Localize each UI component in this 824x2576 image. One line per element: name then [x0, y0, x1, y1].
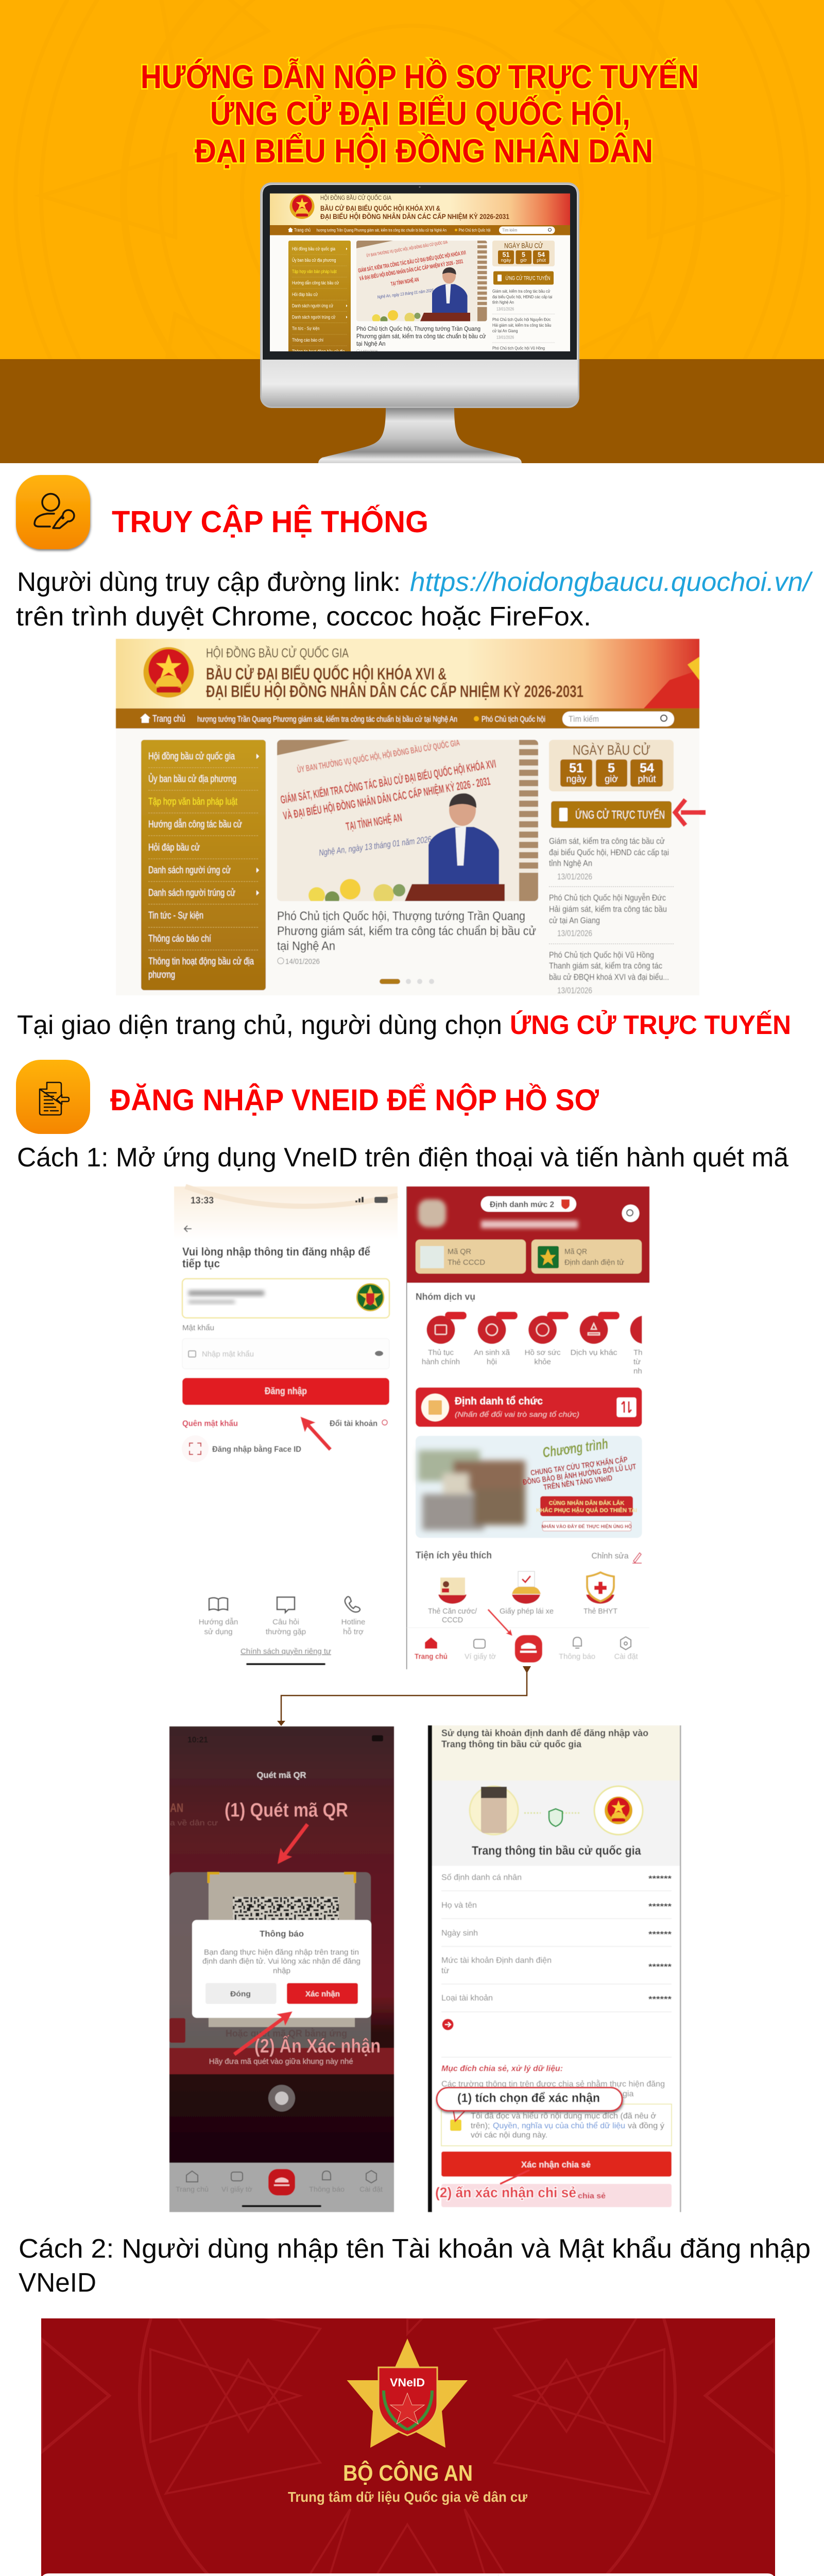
website screenshot inside monitor: 13/01/2026 [496, 335, 514, 340]
title: ĐẠI BIỂU HỘI ĐỒNG NHÂN DÂN [195, 132, 653, 170]
phone 4: share confirmation: chia sẻ [578, 2192, 606, 2200]
countdown card: 51 [569, 761, 583, 775]
news caption [277, 909, 536, 984]
phone 1: login screen: Chính sách quyền riêng tư [241, 1647, 331, 1656]
website screenshot inside monitor: Hội đồng bầu cử quốc gia [292, 246, 336, 252]
website screenshot inside monitor: ỨNG CỬ TRỰC TUYẾN [506, 275, 551, 281]
phone 1: login screen: 13:33 [191, 1195, 214, 1206]
news photo: Nghệ An, ngày 13 tháng 01 năm 2026 [318, 834, 432, 858]
phone 4: share confirmation: ****** [648, 1962, 672, 1972]
website screenshot inside monitor: Tin tức - Sự kiện [292, 326, 319, 332]
red header with star logo: Trung tâm dữ liệu Quốc gia về dân cư [288, 2489, 528, 2505]
title: HƯỚNG DẪN NỘP HỒ SƠ TRỰC TUYẾN [141, 58, 699, 95]
modal: thong bao: Thông báo [260, 1929, 304, 1939]
website screenshot inside monitor: Trang chủ [294, 228, 311, 233]
phone 4: share confirmation: trên); [471, 2122, 490, 2130]
annotation: share confirm: (2) ấn xác nhận chi sẻ [435, 2184, 576, 2200]
website screenshot inside monitor: VÀ ĐẠI BIỂU HỘI ĐỒNG NHÂN DÂN CÁC CẤP NHIỆM KỲ 2026 - 2031 [359, 258, 464, 282]
phone 1: login screen: Quên mật khẩu [182, 1419, 238, 1428]
phone 2: vneid home [406, 1187, 658, 1669]
modal: thong bao: Xác nhận [305, 1990, 340, 1998]
promo banner: ĐỒNG BÀO BỊ ẢNH HƯỞNG BỞI LŨ LỤT [522, 1462, 637, 1487]
website screenshot inside monitor: 54 [538, 251, 545, 259]
website screenshot inside monitor: ỦY BAN THƯỜNG VỤ QUỐC HỘI, HỘI ĐỒNG BẦU CỬ QUỐC GIA [366, 239, 448, 258]
phone 4: share confirmation: Các trường thông tin trên được chia sẻ nhằm thực hiện đăng [441, 2079, 665, 2089]
side menu: Ủy ban bầu cử địa phương [148, 773, 236, 785]
phone 1: login screen: Đổi tài khoản [330, 1419, 377, 1428]
phone 4: share confirmation: Mục đích chia sẻ, xử lý dữ liệu: [441, 2064, 563, 2073]
news photo: GIÁM SÁT, KIỂM TRA CÔNG TÁC BẦU CỬ ĐẠI BIỂU QUỐC HỘI KHÓA XVI [279, 757, 497, 806]
side menu: Hội đồng bầu cử quốc gia [148, 751, 235, 762]
text block: select online candidacy [17, 1010, 791, 1040]
website screenshot inside monitor: Giám sát, kiểm tra công tác bầu cử [492, 289, 551, 294]
website screenshot inside monitor: Nghệ An, ngày 13 tháng 01 năm 2026 [377, 287, 434, 299]
website screenshot inside monitor: GIÁM SÁT, KIỂM TRA CÔNG TÁC BẦU CỬ ĐẠI BIỂU QUỐC HỘI KHÓA XVI [357, 249, 467, 274]
website screenshot: ĐẠI BIỂU HỘI ĐỒNG NHÂN DÂN CÁC CẤP NHIỆM KỲ 2026-2031 [206, 682, 583, 701]
phone 2: vneid home: Định danh mức 2 [490, 1200, 554, 1209]
phone 3: qr scan: Trang chủ [176, 2185, 209, 2193]
text block: link instructions: trên trình duyệt Chrome, coccoc hoặc FireFox. [16, 602, 591, 632]
phone 2: vneid home: Thẻ BHYT [583, 1607, 617, 1616]
website screenshot inside monitor [270, 194, 570, 366]
countdown card: 54 [640, 761, 654, 775]
text block: select online candidacy: Tại giao diện trang chủ, người dùng chọn [17, 1010, 502, 1040]
service icons: từ cơ [633, 1358, 652, 1366]
bottom nav: Cài đặt [614, 1652, 638, 1661]
service icons: Hồ sơ sức [525, 1348, 561, 1357]
phone 2: vneid home: Nhóm dịch vụ [416, 1292, 475, 1302]
news photo [277, 737, 538, 906]
news list: cử tại An Giang [549, 916, 600, 925]
website screenshot inside monitor: Phó Chủ tịch Quốc hội [458, 228, 491, 233]
phone 3: qr scan: Hoặc quét mã QR bằng ứng [226, 2028, 347, 2039]
phone 1: login screen: thường gặp [266, 1628, 306, 1636]
annotation: scan qr [225, 1800, 348, 1860]
phone 2: vneid home: (Nhấn để đổi vai trò sang tổ chức) [455, 1410, 579, 1418]
website screenshot inside monitor: Hải giám sát, kiểm tra công tác bầu [492, 323, 552, 328]
button: ung cu truc tuyen: ỨNG CỬ TRỰC TUYẾN [575, 808, 665, 821]
website screenshot inside monitor: Tìm kiếm [502, 228, 517, 233]
phone 2: vneid home: Giấy phép lái xe [500, 1607, 554, 1616]
icon: face to emblem [470, 1786, 643, 1835]
bottom nav [415, 1635, 638, 1663]
promo banner: CHUNG TAY CỨU TRỢ KHẨN CẤP [530, 1455, 628, 1478]
phone 4: share confirmation: Ngày sinh [441, 1929, 478, 1938]
news list: bầu cử ĐBQH khoá XVI và đại biểu... [549, 972, 669, 982]
website screenshot inside monitor: TẠI TỈNH NGHỆ AN [390, 276, 419, 287]
phone 4: share confirmation: ****** [648, 1929, 672, 1939]
annotation: confirm [234, 2014, 381, 2057]
website screenshot inside monitor: Phó Chủ tịch Quốc hội Vũ Hồng [492, 345, 545, 350]
website screenshot: HỘI ĐỒNG BẦU CỬ QUỐC GIA [206, 645, 349, 660]
website screenshot inside monitor: Phương giám sát, kiểm tra công tác chuẩn bị bầu cử [356, 333, 486, 340]
arrow: connector [277, 1666, 531, 1726]
phone 2: vneid home: Tiện ích yêu thích [416, 1550, 492, 1561]
callout: tick to confirm: (1) tích chọn để xác nhận [457, 2091, 600, 2105]
side menu: Danh sách người ứng cử [148, 865, 231, 876]
news list: Phó Chủ tịch Quốc hội Nguyễn Đức [549, 893, 666, 903]
phone 4: share confirmation: với các nội dung này. [471, 2131, 547, 2140]
website screenshot inside monitor: HỘI ĐỒNG BẦU CỬ QUỐC GIA [320, 194, 391, 201]
service icons: Thủ tục [428, 1348, 454, 1357]
phone 1: login screen: Hotline [341, 1618, 365, 1626]
bottom nav: Trang chủ [415, 1652, 448, 1661]
service icons: hành chính [422, 1358, 460, 1366]
service icons: An sinh xã [474, 1348, 510, 1357]
nav bar [140, 711, 674, 726]
annotation: share confirm [435, 2170, 576, 2200]
title [141, 58, 699, 170]
phone 1: login screen: hỗ trợ [343, 1628, 364, 1636]
website screenshot: BẦU CỬ ĐẠI BIỂU QUỐC HỘI KHÓA XVI & [206, 665, 447, 683]
phone 1: login screen: Đăng nhập bằng Face ID [212, 1444, 301, 1454]
nav bar: hượng tướng Trần Quang Phương giám sát, kiểm tra công tác chuẩn bị bầu cử tại Nghệ An [197, 715, 457, 724]
annotation: scan qr: (1) Quét mã QR [225, 1800, 348, 1821]
phone 1: login screen: Câu hỏi [272, 1618, 299, 1626]
countdown card: ngày [566, 774, 587, 784]
service icons: nhà [633, 1367, 647, 1376]
phone 4: share confirmation: Trang thông tin bầu cử quốc gia [472, 1844, 641, 1858]
phone 4: share confirmation: ****** [648, 1902, 672, 1911]
countdown card: 5 [608, 761, 615, 775]
website screenshot inside monitor: phút [537, 258, 546, 263]
icon: desktop monitor [260, 182, 579, 463]
phone 3: qr scan: Cài đặt [359, 2185, 383, 2193]
service icons: hội [487, 1358, 497, 1366]
phone 1: login screen: Đăng nhập [265, 1386, 307, 1396]
title: ỨNG CỬ ĐẠI BIỂU QUỐC HỘI, [210, 94, 630, 132]
news list: Giám sát, kiểm tra công tác bầu cử [549, 836, 665, 846]
promo banner: NHẤN VÀO ĐÂY ĐỂ THỰC HIỆN ỦNG HỘ [541, 1523, 632, 1529]
phone 4: share confirmation: ****** [648, 1874, 672, 1884]
phone 4: share confirmation: Trang thông tin bầu cử quốc gia [441, 1739, 582, 1750]
red header with star logo: BỘ CÔNG AN [343, 2460, 473, 2486]
phone 1: login screen: Hướng dẫn [199, 1618, 238, 1626]
phone 4: share confirmation [428, 1725, 681, 2212]
modal: thong bao: nhập [273, 1967, 290, 1975]
promo banner: CÙNG NHÂN DÂN ĐẮK LẮK [549, 1500, 624, 1506]
phone 2: vneid home: Mã QR [448, 1247, 471, 1256]
countdown card [549, 740, 674, 791]
service icons: khỏe [534, 1358, 551, 1366]
phone 1: login screen: Vui lòng nhập thông tin đăng nhập để [182, 1245, 370, 1258]
nav bar: Trang chủ [152, 714, 185, 724]
website screenshot inside monitor: Thông tin hoạt động bầu cử địa [292, 349, 345, 354]
website screenshot inside monitor: giờ [520, 258, 527, 263]
heading: TRUY CẬP HỆ THỐNG [112, 504, 428, 539]
news list: Phó Chủ tịch Quốc hội Vũ Hồng [549, 950, 654, 960]
phone 4: share confirmation: gia [623, 2090, 633, 2098]
text block: link instructions: Người dùng truy cập đường link: [17, 567, 401, 597]
website screenshot inside monitor: ĐẠI BIỂU HỘI ĐỒNG NHÂN DÂN CÁC CẤP NHIỆM KỲ 2026-2031 [320, 212, 509, 221]
website screenshot inside monitor: đại biểu Quốc hội, HĐND các cấp tại [492, 294, 553, 299]
phone 4: share confirmation: từ [441, 1967, 449, 1975]
phone 1: login screen: Mật khẩu [182, 1324, 214, 1332]
phone 1: login screen [174, 1187, 398, 1669]
phone 2: vneid home: Mã QR [564, 1247, 587, 1256]
phone 1: login screen: sử dụng [204, 1628, 233, 1636]
service icons [422, 1312, 658, 1376]
modal: thong bao [192, 1920, 371, 2018]
side menu: phương [148, 970, 175, 980]
phone 3: qr scan: a về dân cư [170, 1819, 218, 1827]
nav bar: Phó Chủ tịch Quốc hội [482, 715, 545, 724]
annotation: confirm: (2) Ấn Xác nhận [254, 2035, 381, 2057]
website screenshot inside monitor: Hướng dẫn công tác bầu cử [292, 280, 339, 286]
heading: ĐĂNG NHẬP VNEID ĐỂ NỘP HỒ SƠ [110, 1083, 599, 1117]
text block: way 2 [19, 2234, 811, 2298]
website screenshot inside monitor: Thông cáo báo chí [292, 337, 323, 343]
news list: Thanh giám sát, kiểm tra công tác [549, 961, 662, 971]
side menu: Thông cáo báo chí [148, 934, 212, 944]
side menu [141, 740, 266, 990]
icon: user with key [16, 475, 90, 549]
website screenshot inside monitor: hượng tướng Trần Quang Phương giám sát, kiểm tra công tác chuẩn bị bầu cử tại Nghệ An [316, 228, 447, 233]
website screenshot inside monitor: tỉnh Nghệ An [492, 300, 514, 305]
promo banner: Chương trình [542, 1435, 609, 1461]
phone 2: vneid home: Định danh tổ chức [455, 1396, 543, 1407]
phone 2: vneid home: Thẻ Căn cước/ [428, 1607, 477, 1616]
phone 4: share confirmation: Tôi đã đọc và hiểu rõ nội dung mục đích (đã nêu ở [471, 2111, 657, 2121]
news list: tỉnh Nghệ An [549, 858, 592, 868]
side menu: Thông tin hoạt động bầu cử địa [148, 956, 254, 967]
website screenshot inside monitor: Ủy ban bầu cử địa phương [292, 257, 336, 263]
arrow [675, 800, 706, 825]
modal: thong bao: định danh điện tử. Vui lòng xác nhận để đăng [202, 1957, 360, 1966]
phone 4: share confirmation: và đồng ý [628, 2122, 664, 2130]
phone 4: share confirmation: Quyền, nghĩa vụ của chủ thể dữ liệu [493, 2121, 625, 2130]
phone 4: share confirmation: Họ và tên [441, 1901, 477, 1910]
website screenshot inside monitor: Danh sách người trúng cử [292, 314, 336, 320]
callout: tick to confirm [437, 2088, 622, 2121]
website screenshot inside monitor: Phó Chủ tịch Quốc hội Nguyễn Đức [492, 317, 551, 322]
phone 2: vneid home: CCCD [442, 1616, 463, 1624]
phone 3: qr scan: Ví giấy tờ [221, 2185, 252, 2193]
news caption: tại Nghệ An [277, 939, 335, 953]
countdown card: giờ [605, 774, 618, 784]
phone 2: vneid home: Thẻ CCCD [448, 1258, 485, 1267]
arrow [304, 1420, 331, 1450]
phone 3: qr scan: 10:21 [187, 1736, 208, 1744]
news caption: Phó Chủ tịch Quốc hội, Thượng tướng Trần Quang [277, 909, 525, 923]
news list [549, 836, 674, 995]
panel: truy cap he thong [16, 475, 813, 1040]
red header with star logo: VNeID [390, 2376, 425, 2389]
website screenshot inside monitor: NGÀY BẦU CỬ [504, 242, 543, 249]
website screenshot inside monitor: ngày [501, 258, 511, 263]
phone 4: share confirmation: Loại tài khoản [441, 1994, 493, 2003]
text block: select online candidacy: ỨNG CỬ TRỰC TUYẾN [510, 1010, 791, 1040]
panel: dang nhap vneid [16, 1060, 811, 2576]
phone 3: qr scan: Thông báo [309, 2185, 345, 2193]
service icons: Thông [633, 1348, 656, 1357]
text block: way 1: Cách 1: Mở ứng dụng VneID trên điện thoại và tiến hành quét mã [17, 1143, 788, 1173]
nav bar: Tìm kiếm [569, 714, 599, 724]
news photo: VÀ ĐẠI BIỂU HỘI ĐỒNG NHÂN DÂN CÁC CẤP NHIỆM KỲ 2026 - 2031 [282, 774, 491, 822]
side menu: Tin tức - Sự kiện [148, 910, 203, 921]
news list: 13/01/2026 [557, 986, 592, 995]
phone 1: login screen: tiếp tục [182, 1257, 220, 1270]
news list: Hải giám sát, kiểm tra công tác bầu [549, 904, 667, 914]
news caption: Phương giám sát, kiểm tra công tác chuẩn bị bầu cử [277, 924, 536, 938]
modal: thong bao: Bạn đang thực hiện đăng nhập trên trang tin [204, 1948, 359, 1957]
panel: vneid web login [41, 2318, 775, 2576]
phone 2: vneid home: Định danh điện tử [564, 1258, 624, 1267]
website screenshot inside monitor: 51 [503, 251, 509, 259]
news photo: ỦY BAN THƯỜNG VỤ QUỐC HỘI, HỘI ĐỒNG BẦU CỬ QUỐC GIA [296, 737, 460, 775]
text block: link instructions: https://hoidongbaucu.quochoi.vn/ [410, 567, 813, 597]
panel: hero header [0, 0, 824, 463]
news photo: TẠI TỈNH NGHỆ AN [345, 811, 403, 833]
website screenshot inside monitor: 5 [522, 251, 525, 259]
text block: link instructions [16, 567, 813, 632]
countdown card: phút [638, 774, 656, 784]
phone 4: share confirmation: ****** [648, 1994, 672, 2004]
phone 4: share confirmation: Xác nhận chia sẻ [521, 2160, 591, 2170]
modal: thong bao: Đóng [230, 1990, 251, 1998]
website screenshot inside monitor: Danh sách người ứng cử [292, 303, 333, 309]
side menu: Tập hợp văn bản pháp luật [148, 796, 238, 807]
icon: document with arrow [16, 1060, 90, 1134]
news list: 13/01/2026 [557, 928, 592, 938]
website screenshot inside monitor: 13/01/2026 [496, 306, 514, 311]
website screenshot inside monitor: Phó Chủ tịch Quốc hội, Thượng tướng Trần Quang [356, 325, 480, 332]
bottom nav: Thông báo [559, 1652, 595, 1661]
phone 2: vneid home: Chỉnh sửa [591, 1552, 629, 1561]
promo banner: KHẮC PHỤC HẬU QUẢ DO THIÊN TAI [536, 1507, 637, 1514]
promo banner: TRÊN NỀN TẢNG VNeID [543, 1473, 613, 1492]
website screenshot inside monitor: Hỏi đáp bầu cử [292, 292, 318, 298]
phone 4: share confirmation: Sử dụng tài khoản định danh để đăng nhập vào [441, 1728, 648, 1738]
text block: way 2: VNeID [19, 2268, 96, 2298]
countdown card: NGÀY BẦU CỬ [573, 741, 650, 758]
phone 4: share confirmation: Số định danh cá nhân [441, 1873, 522, 1882]
phone 3: qr scan: AN [170, 1801, 183, 1815]
news list: đại biểu Quốc hội, HĐND các cấp tại [549, 848, 669, 857]
red header with star logo [41, 2318, 775, 2576]
text block: way 2: Cách 2: Người dùng nhập tên Tài khoản và Mật khẩu đăng nhập [19, 2234, 811, 2264]
button: ung cu truc tuyen [551, 801, 672, 828]
phone 4: share confirmation: Mức tài khoản Định danh điện [441, 1956, 552, 1965]
favorites icons [438, 1571, 614, 1604]
side menu: Danh sách người trúng cử [148, 888, 235, 899]
website screenshot inside monitor: BẦU CỬ ĐẠI BIỂU QUỐC HỘI KHÓA XVI & [320, 204, 440, 212]
service icons: Dịch vụ khác [571, 1348, 617, 1357]
website screenshot inside monitor: cử tại An Giang [492, 328, 518, 333]
news caption: 14/01/2026 [285, 957, 320, 966]
website screenshot inside monitor: tại Nghệ An [356, 340, 385, 347]
side menu: Hỏi đáp bầu cử [148, 842, 200, 853]
phone 3: qr scan [169, 1726, 394, 2212]
arrow [488, 1609, 511, 1634]
phone 3: qr scan: Quét mã QR [256, 1770, 306, 1780]
website screenshot inside monitor: 14/01/2026 [360, 349, 378, 353]
news list: 13/01/2026 [557, 872, 592, 882]
website screenshot inside monitor: Tập hợp văn bản pháp luật [292, 269, 337, 275]
bottom nav: Ví giấy tờ [465, 1652, 496, 1661]
phone 3: qr scan: Hãy đưa mã quét vào giữa khung này nhé [209, 2057, 353, 2066]
side menu: Hướng dẫn công tác bầu cử [148, 819, 242, 830]
phone 1: login screen: Nhập mật khẩu [202, 1350, 254, 1359]
promo banner [416, 1435, 642, 1538]
website screenshot [116, 639, 706, 995]
